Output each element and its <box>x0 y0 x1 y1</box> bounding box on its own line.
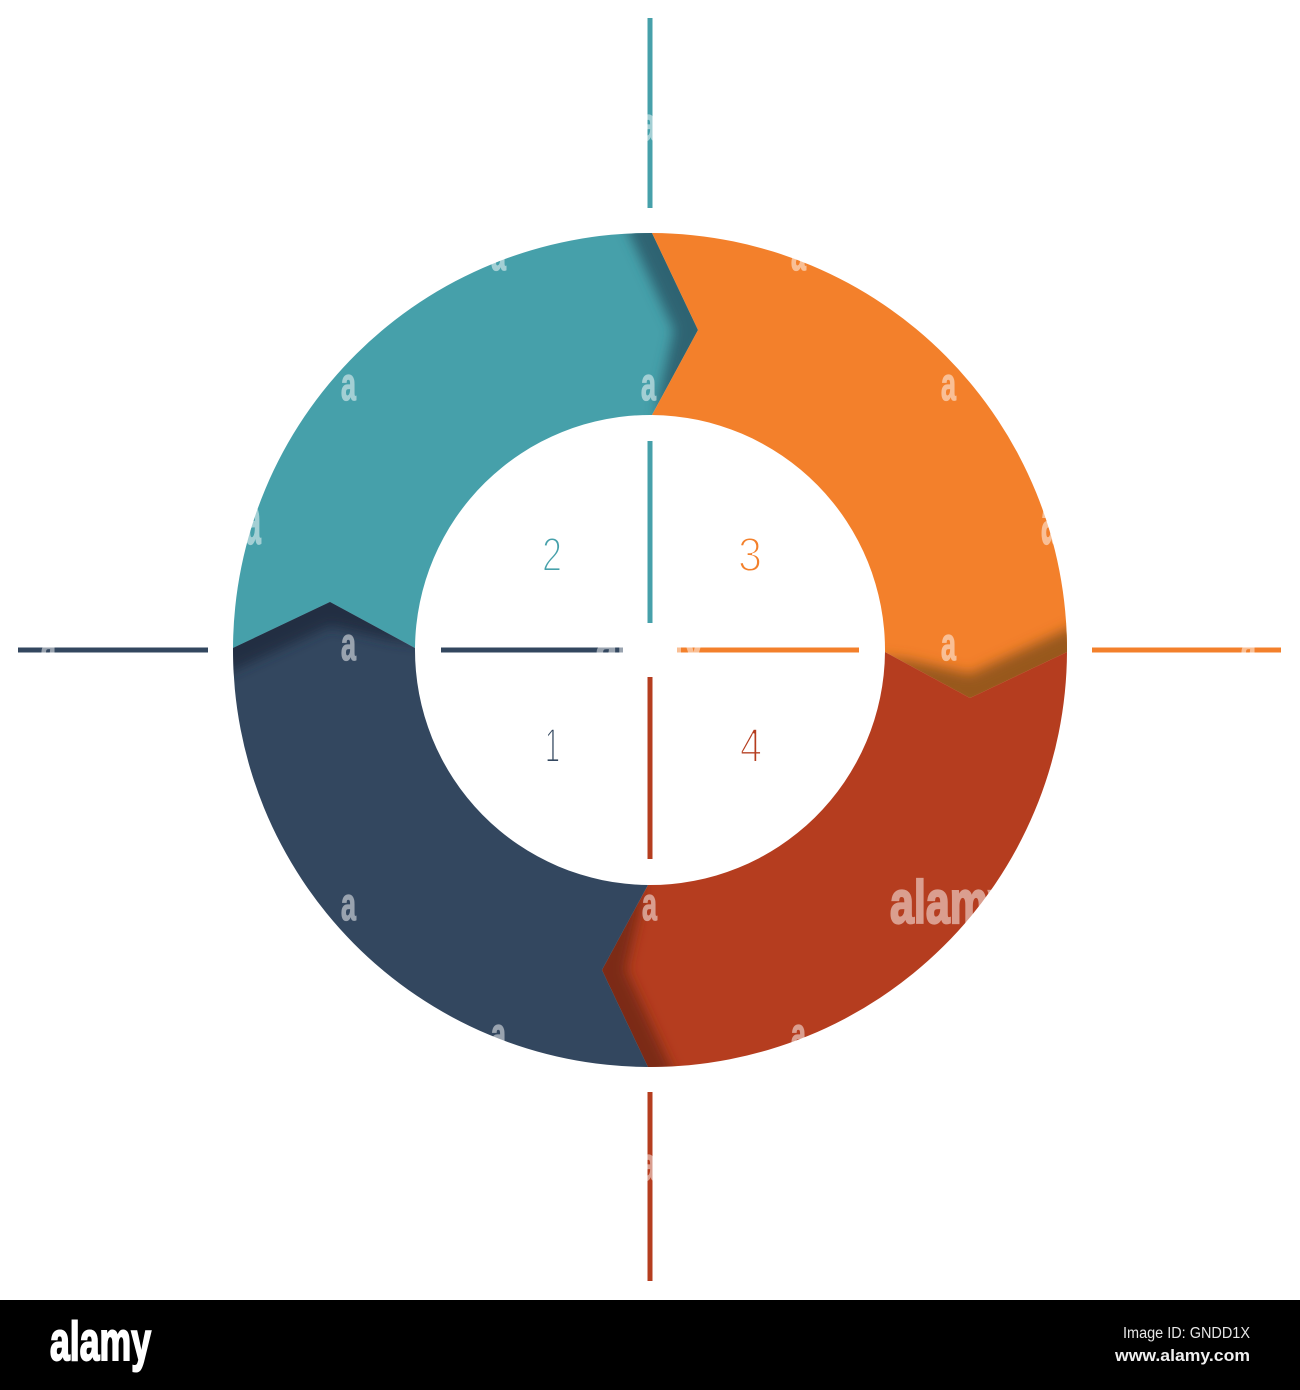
footer bar <box>0 1300 1300 1390</box>
watermark pattern: a <box>41 618 56 670</box>
inner line: navy <box>441 648 623 652</box>
ring diagram <box>222 222 1078 1078</box>
inner line: orange <box>677 648 859 652</box>
image id: Image ID: GNDD1X <box>1123 1325 1251 1342</box>
arrow segment 3: orange <box>652 233 1078 712</box>
outer line: top teal <box>648 18 652 208</box>
inner line: rust <box>648 677 652 859</box>
number 4: 4 <box>740 720 762 773</box>
watermark pattern: a <box>941 618 956 670</box>
watermark pattern: alamy <box>596 618 704 670</box>
watermark pattern: a <box>791 228 806 280</box>
arrow segment 1: navy <box>222 588 648 1067</box>
watermark pattern: a <box>491 1008 506 1060</box>
watermark pattern: a <box>1041 481 1057 559</box>
number 2: 2 <box>542 529 562 582</box>
watermark pattern: a <box>341 878 356 930</box>
arrow segment 2: teal <box>233 222 712 648</box>
outer line: bottom rust <box>648 1092 652 1281</box>
inner line: teal <box>648 441 652 623</box>
watermark pattern: a <box>641 98 656 150</box>
watermark pattern: a <box>641 358 656 410</box>
watermark pattern: a <box>941 358 956 410</box>
footer logo: alamy <box>50 1310 151 1372</box>
watermark pattern <box>41 98 1256 1190</box>
arrow segment 4: rust <box>588 652 1067 1078</box>
watermark pattern: a <box>341 358 356 410</box>
watermark pattern: alamy <box>890 869 1012 936</box>
website: www.alamy.com <box>1114 1347 1250 1365</box>
watermark pattern: a <box>791 1008 806 1060</box>
watermark pattern: a <box>491 228 506 280</box>
watermark pattern: a <box>641 1138 656 1190</box>
outer line: right orange <box>1092 648 1281 652</box>
watermark pattern: a <box>245 481 261 559</box>
watermark pattern: a <box>1241 618 1256 670</box>
number 1: 1 <box>545 720 560 773</box>
outer line: left navy <box>18 648 208 652</box>
watermark pattern: a <box>341 618 356 670</box>
watermark pattern: a <box>642 878 657 930</box>
number 3: 3 <box>738 529 762 582</box>
